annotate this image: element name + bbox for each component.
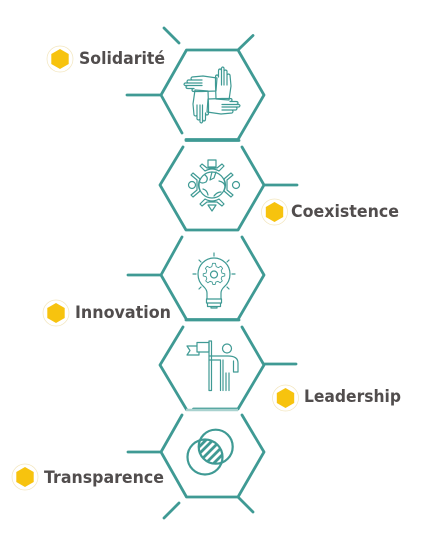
icon: overlapping circles	[188, 430, 233, 474]
label: Solidarité	[47, 46, 165, 72]
icon: globe with people	[188, 160, 240, 211]
hexagon: Innovation	[128, 237, 264, 320]
label: Coexistence: Coexistence	[291, 202, 399, 222]
label: Solidarité: Solidarité	[79, 49, 165, 69]
label: Innovation: Innovation	[75, 303, 171, 323]
icon: joined hands	[184, 67, 240, 123]
label: Transparence	[12, 464, 164, 490]
hexagon: Leadership	[160, 320, 296, 410]
icon: light bulb with gear	[193, 253, 235, 308]
label: Leadership	[272, 385, 401, 411]
label: Transparence: Transparence	[44, 468, 164, 488]
label: Coexistence	[262, 199, 399, 225]
hexagon: Coexistence	[160, 140, 297, 230]
icon: leader with flag	[187, 341, 238, 390]
label: Leadership: Leadership	[304, 387, 401, 407]
hexagon: Transparence	[128, 410, 264, 518]
hexagon: Solidarité	[127, 28, 264, 140]
label: Innovation	[43, 300, 171, 326]
